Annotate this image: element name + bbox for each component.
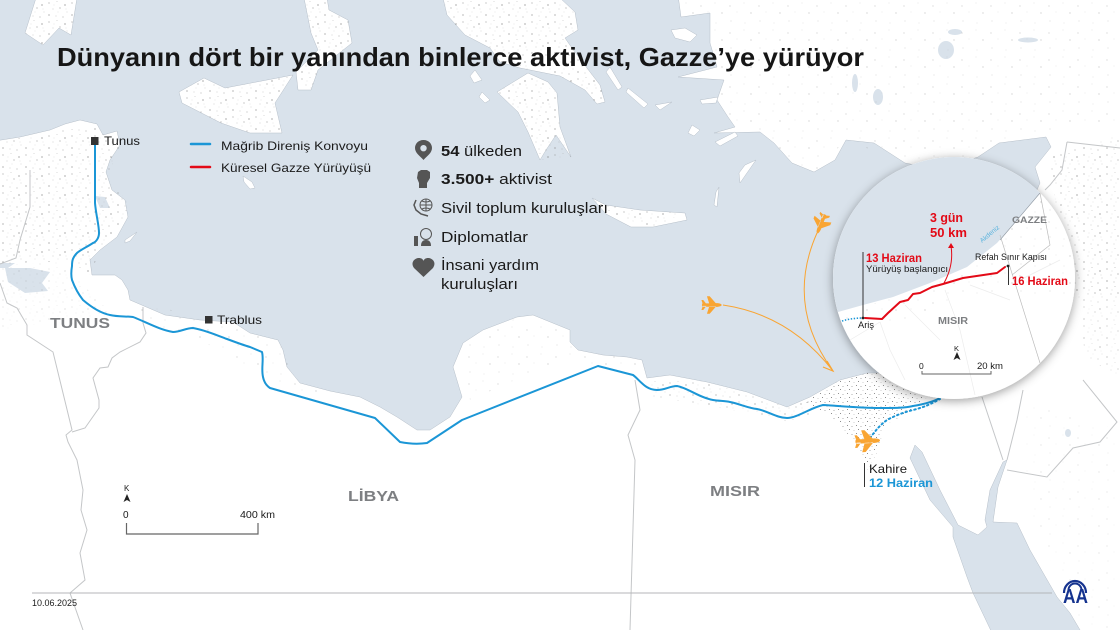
inset coast speckle	[846, 202, 1070, 320]
city: Tunus: Tunus	[104, 134, 140, 148]
item: sivil toplum: Sivil toplum kuruluşları	[441, 200, 608, 217]
inset sea	[833, 157, 1040, 312]
AA logo: AA	[1063, 586, 1088, 608]
city: Trablus	[205, 313, 262, 327]
item: kuruluşları: kuruluşları	[441, 276, 518, 293]
icon: plane west	[701, 296, 722, 314]
inset leader Refah	[1008, 267, 1010, 285]
inset map circle: 3 gün	[930, 211, 963, 225]
icon: plane Cairo	[854, 429, 881, 453]
inset map circle: Refah Sınır Kapısı	[975, 252, 1047, 262]
inset map circle: GAZZE	[1012, 215, 1047, 226]
country labels: TUNUS	[50, 315, 110, 332]
route: Mağrib Direniş Konvoyu	[71, 145, 940, 444]
inset red route	[865, 267, 1005, 319]
inset map circle	[820, 150, 1075, 399]
item: aktivist: 3.500+ aktivist	[441, 171, 553, 188]
flight arcs	[723, 233, 833, 371]
city: Kahire	[864, 462, 933, 490]
inset map circle: Yürüyüş başlangıcı	[866, 264, 948, 275]
date: 10.06.2025	[32, 598, 77, 608]
inset scale: K	[954, 344, 959, 353]
legend	[191, 139, 371, 175]
inset map circle: Akdeniz	[979, 224, 1001, 245]
inset map circle: Ariş	[858, 320, 875, 330]
inset map circle: 50 km	[930, 226, 967, 240]
city: Kahire: Kahire	[869, 462, 907, 476]
scale bar: 0	[123, 510, 129, 521]
inset map circle: 16 Haziran	[1012, 276, 1068, 288]
scale bar	[123, 484, 275, 534]
inset scale	[919, 344, 1003, 374]
info list	[413, 140, 608, 293]
item: diplomatlar: Diplomatlar	[441, 229, 528, 246]
scale bar: K	[124, 484, 130, 493]
route: dotted link from Cairo	[870, 399, 940, 438]
scale bar: 400 km	[240, 510, 275, 521]
footer line	[32, 592, 1052, 594]
legend: blue route: Mağrib Direniş Konvoyu	[221, 139, 368, 153]
icon: globe hands	[414, 199, 432, 216]
icon: pin	[415, 140, 432, 160]
icon: plane north	[809, 210, 833, 237]
inset scale: 0	[919, 361, 924, 371]
inset borders	[1000, 193, 1050, 363]
inset arrow	[944, 246, 952, 283]
icon: diplomats	[414, 228, 432, 246]
inset dotted route	[842, 318, 863, 321]
country labels	[50, 315, 760, 505]
inset roads	[850, 260, 1060, 395]
map: country borders	[0, 142, 1120, 630]
city: Kahire: 12 Haziran	[869, 476, 933, 490]
icon: fist	[417, 170, 430, 188]
title: Dünyanın dört bir yanından binlerce aktivist, Gazze’ye yürüyor	[57, 42, 864, 72]
map: red sea and gulfs	[910, 445, 1083, 630]
legend: red route: Küresel Gazze Yürüyüşü	[221, 161, 371, 175]
inset map circle: MISIR	[938, 316, 969, 327]
inset scale: 20 km	[977, 361, 1003, 371]
country labels: MISIR	[710, 483, 760, 500]
inset labels: 13 Haziran	[866, 253, 922, 265]
item: insani yardım: İnsani yardım	[441, 256, 539, 274]
city: Trablus: Trablus	[217, 313, 262, 327]
country labels: LİBYA	[348, 488, 399, 505]
item: 54 ülkeden: 54 ülkeden	[441, 143, 522, 160]
inset leader Ariş	[862, 252, 864, 318]
icon: heart handshake	[413, 258, 434, 277]
map: lakes	[0, 29, 1071, 437]
city: Tunus	[91, 134, 140, 148]
